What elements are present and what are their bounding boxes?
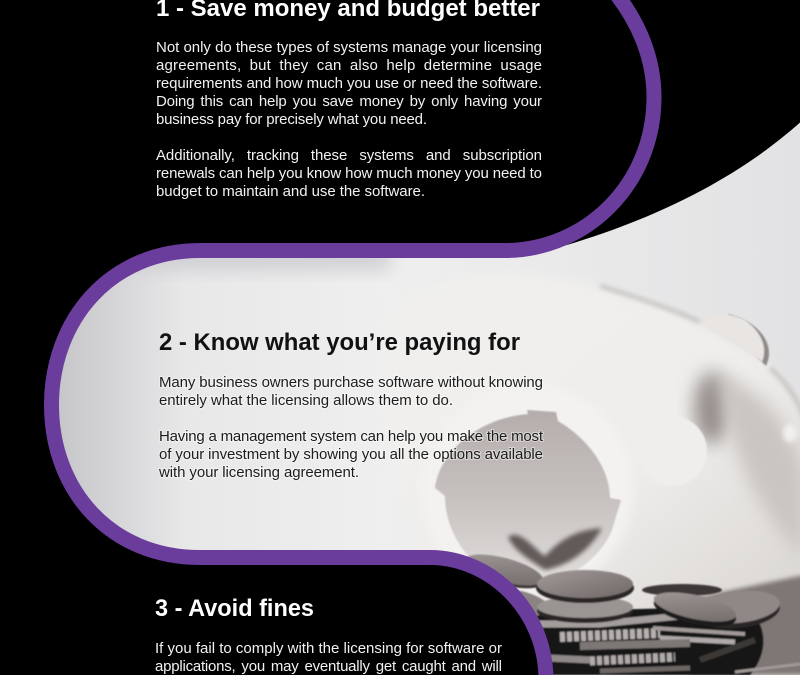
body paragraph 1: entirely what the licensing allows them to do. [159,392,453,409]
coin: upper left [462,548,547,595]
body paragraph 1: Many business owners purchase software without knowing [159,374,543,391]
coin pile [459,548,800,675]
coin: top centre [536,570,634,603]
snout button [637,416,707,486]
body paragraph 1: agreements, but they can also help determine usage [156,57,542,74]
coin stack base [520,608,763,675]
heading 2: 2 - Know what you’re paying for [159,329,520,356]
section 3 [155,595,502,675]
piggy ear [700,314,764,362]
body paragraph 2 [156,147,542,200]
body paragraph 2: Additionally, tracking these systems and subscription [156,147,542,164]
body paragraph 2: Having a management system can help you make the most [159,428,544,445]
coin: right front [651,587,739,632]
section 2 [158,329,544,481]
soft shading at top of pig [600,286,800,420]
body paragraph 2 [158,428,544,481]
right side shading [720,375,800,560]
coin: middle stack [537,596,633,623]
body paragraph: If you fail to comply with the licensing for software or [155,640,502,657]
blurred falling coins [508,528,602,570]
highlight on the pig side [783,424,797,442]
shaded ear rim [728,314,769,366]
body paragraph: applications, you may eventually get caught and will [155,658,502,675]
stacked coin edges [535,616,800,672]
coin: right rear [694,587,782,632]
body paragraph 2: of your investment by showing you all the options available [159,446,543,463]
body paragraph 2: budget to maintain and use the software. [156,183,425,200]
body paragraph 1: Doing this can help you save money by only having your [156,93,542,110]
body paragraph 2: renewals can help you know how much money you need to [156,165,542,182]
body paragraph 1: business pay for precisely what you need. [156,111,427,128]
purple ribbon [52,0,654,675]
body paragraph 1 [156,39,542,128]
body paragraph 2: with your licensing agreement. [158,464,359,481]
coin: lower left [459,582,551,627]
body paragraph 1 [159,374,543,409]
heading 3: 3 - Avoid fines [155,595,314,622]
body shading right of the snout [694,372,730,444]
body paragraph 1: requirements and how much you use or need the software. [156,75,542,92]
coin slot hole [435,410,621,586]
body paragraph [155,640,502,675]
snout ring [421,384,633,596]
section 1 [156,0,542,200]
shadow beneath the pig [690,575,800,675]
top vignette of the backdrop [90,246,390,270]
coin: far background [642,584,722,596]
piggy bank body [387,274,800,620]
body paragraph 1: Not only do these types of systems manage your licensing [156,39,542,56]
